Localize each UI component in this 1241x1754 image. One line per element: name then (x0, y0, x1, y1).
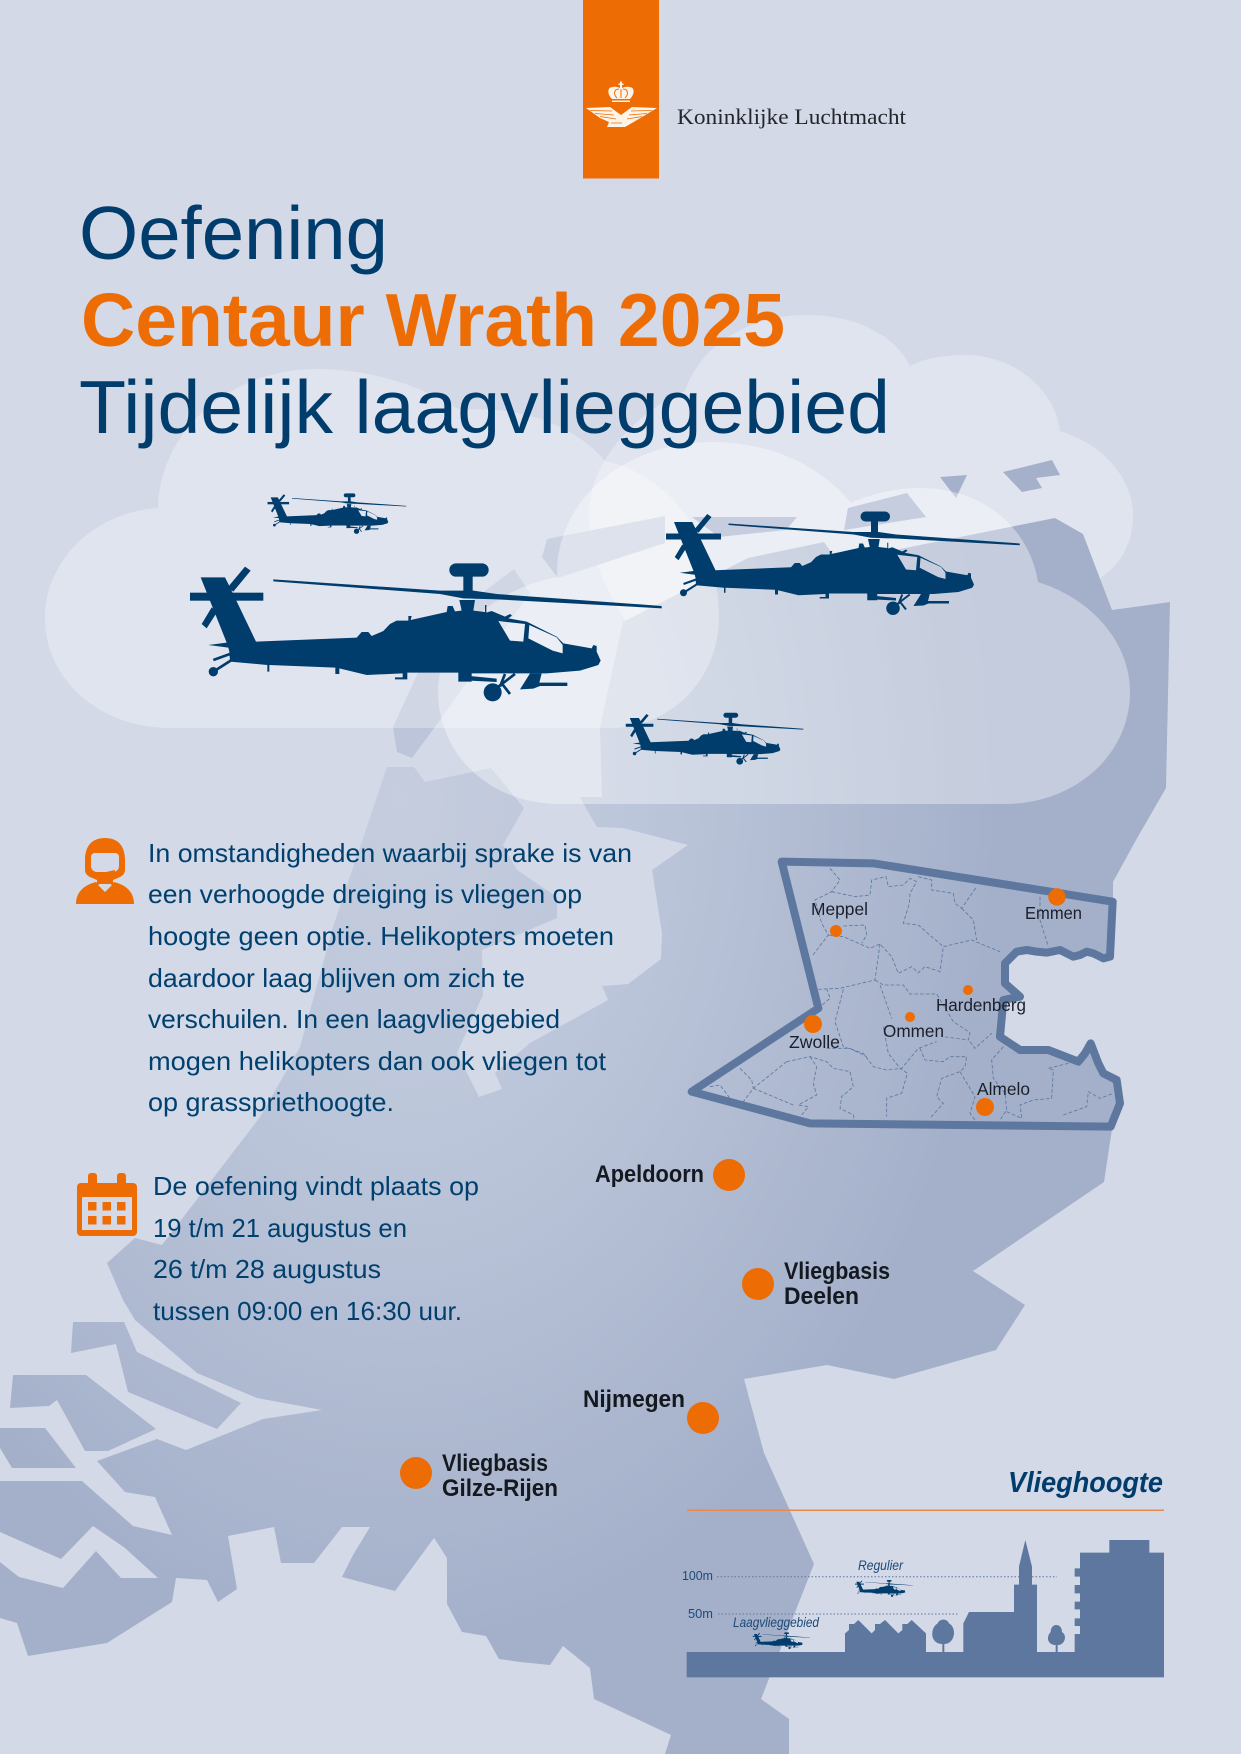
low flight helicopter (753, 1632, 810, 1649)
location: Nijmegen (583, 1386, 719, 1434)
inset: town Hardenberg: Hardenberg (936, 995, 1026, 1015)
helicopter: bottom small (626, 713, 803, 765)
text: dates: 26 t/m 28 augustus (153, 1254, 381, 1284)
map: Wadden island 5 (542, 516, 665, 578)
inset: town Hardenberg (936, 985, 1026, 1015)
tree large (932, 1620, 954, 1652)
text: dates: tussen 09:00 en 16:30 uur. (153, 1296, 462, 1326)
location: Vliegbasis Gilze-Rijen (400, 1450, 558, 1502)
logo: wings (586, 107, 657, 127)
map: Wadden island 1 (940, 475, 967, 498)
inset: low flying area (692, 862, 1120, 1127)
location: Apeldoorn (595, 1159, 745, 1191)
tree small (1048, 1625, 1065, 1652)
text: explanation: op grasspriethoogte. (148, 1087, 394, 1117)
ground (687, 1652, 1164, 1677)
inset: municipal borders (710, 868, 1113, 1120)
panel: flight altitude (682, 1467, 1164, 1677)
inset: town Ommen: Ommen (883, 1021, 944, 1041)
label Laagvlieggebied: Laagvlieggebied (733, 1614, 820, 1630)
inset: town Meppel (811, 899, 868, 937)
inset: town Zwolle (789, 1015, 840, 1052)
inset: outline (692, 862, 1120, 1127)
map: Zeeland island north (71, 1322, 241, 1429)
helicopter: right (666, 512, 1020, 615)
altitude line 100m (717, 1576, 1057, 1578)
map: Wadden island 4 (692, 517, 797, 537)
inset: town Almelo (976, 1079, 1030, 1116)
houses (845, 1620, 926, 1652)
map: mainland (0, 518, 1170, 1754)
logo: orange bar (583, 0, 659, 178)
map: Wadden island 2 (1003, 460, 1060, 492)
location: Vliegbasis Deelen (742, 1258, 890, 1310)
text: dates: 19 t/m 21 augustus en (153, 1213, 407, 1243)
map: Zeeland island middle (10, 1375, 156, 1451)
text: explanation: daardoor laag blijven om zich te (148, 963, 525, 993)
altitude label 100m: 100m (682, 1568, 713, 1583)
inset: town Almelo: Almelo (977, 1079, 1030, 1099)
logo: Koninklijke Luchtmacht (583, 0, 906, 178)
panel heading: Vlieghoogte (1008, 1467, 1163, 1499)
church (963, 1540, 1037, 1652)
inset: town Meppel: Meppel (811, 899, 868, 919)
cloud: right (438, 442, 1130, 804)
map: Zeeland island west (0, 1428, 76, 1468)
map: Noord-Holland tip (393, 569, 530, 758)
text: explanation: een verhoogde dreiging is vliegen op (148, 879, 582, 909)
cloud: upper right behind map (589, 315, 1133, 620)
inset: town Ommen (883, 1012, 944, 1041)
location: Apeldoorn: Apeldoorn (595, 1161, 704, 1188)
text: explanation: mogen helikopters dan ook vliegen tot (148, 1046, 607, 1076)
cloud: left (45, 369, 719, 728)
location: Vliegbasis Deelen: Deelen (784, 1283, 859, 1310)
icon: pilot with headset (76, 838, 134, 904)
inset: town Zwolle: Zwolle (789, 1032, 840, 1052)
map of the Netherlands (0, 460, 1170, 1754)
helicopter: large (190, 563, 662, 701)
map: Wadden island 3 (844, 493, 926, 530)
location: Vliegbasis Deelen: Vliegbasis (784, 1258, 890, 1285)
icon: calendar (77, 1173, 137, 1236)
logo: crown (608, 82, 634, 102)
text: explanation: hoogte geen optie. Helikopters moeten (148, 921, 614, 951)
location: Vliegbasis Gilze-Rijen: Gilze-Rijen (442, 1475, 558, 1502)
text: dates: De oefening vindt plaats op (153, 1171, 479, 1201)
logo: wordmark: Koninklijke Luchtmacht (677, 104, 906, 129)
text: explanation: In omstandigheden waarbij sprake is van (148, 838, 632, 868)
inset: town Emmen (1025, 888, 1082, 923)
inset: town Emmen: Emmen (1025, 903, 1082, 923)
text: explanation: verschuilen. In een laagvlieggebied (148, 1004, 560, 1034)
regular flight helicopter (855, 1580, 913, 1597)
label Regulier: Regulier (858, 1557, 904, 1573)
altitude label 50m: 50m (688, 1606, 713, 1621)
location: Nijmegen: Nijmegen (583, 1386, 685, 1413)
skyline (687, 1540, 1164, 1677)
location: Vliegbasis Gilze-Rijen: Vliegbasis (442, 1450, 548, 1477)
heading rule (687, 1510, 1164, 1511)
altitude line 50m (718, 1613, 958, 1615)
title line 3: Tijdelijk laagvlieggebied (79, 365, 890, 449)
text: explanation (148, 838, 632, 1117)
title (79, 191, 890, 449)
title line 1: Oefening (79, 191, 388, 275)
text: dates (153, 1171, 479, 1326)
helicopter: top small (268, 493, 406, 534)
title line 2: Centaur Wrath 2025 (81, 278, 785, 362)
apartment block (1075, 1540, 1164, 1652)
